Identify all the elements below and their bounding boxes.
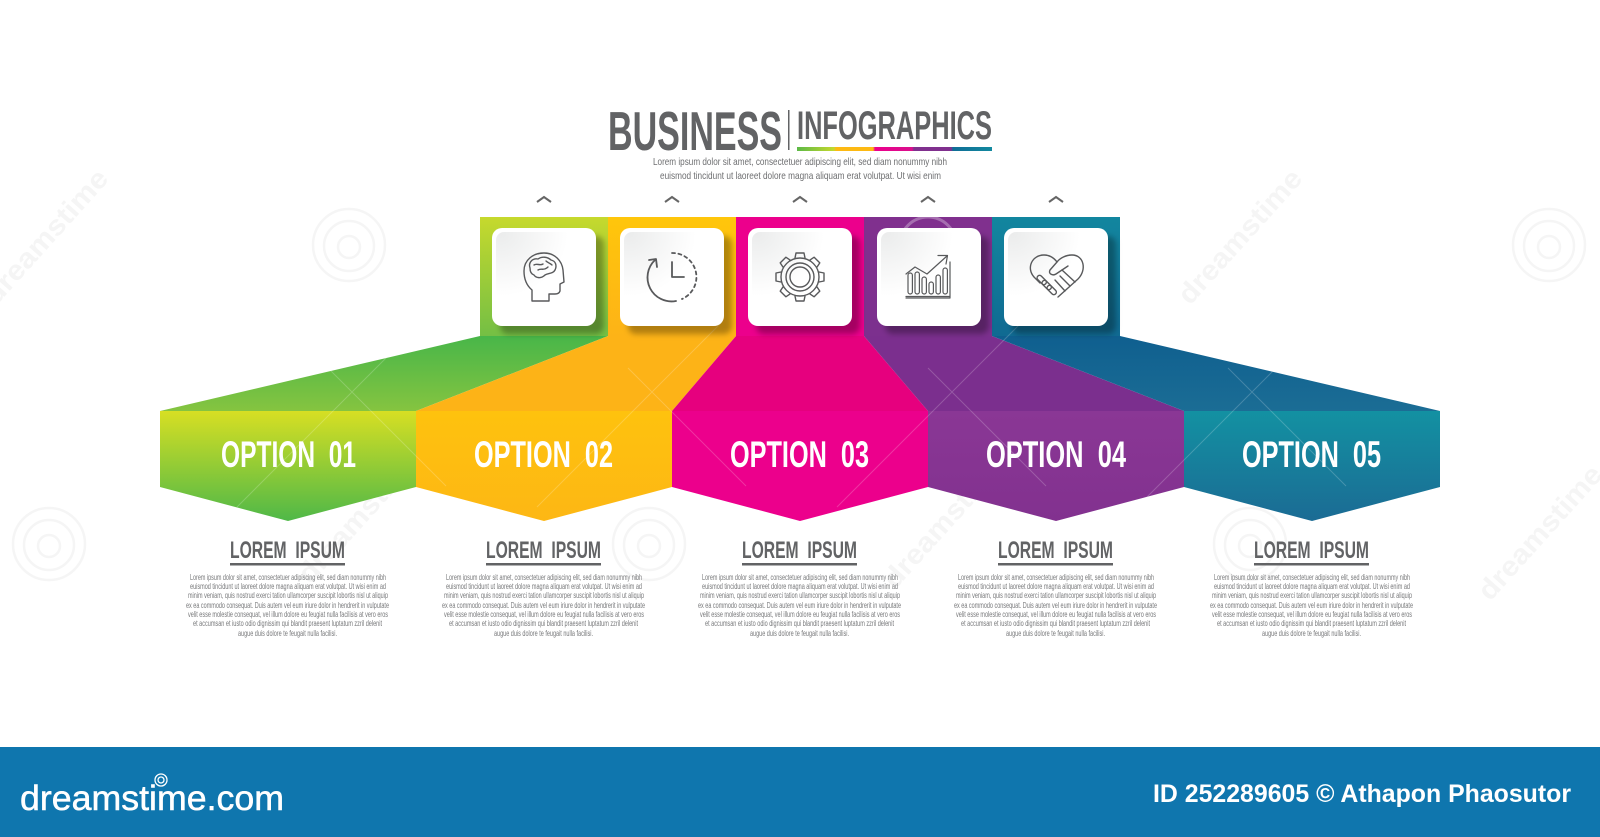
text block 03: velit esse molestie consequat, vel illum dolore eu feugiat nulla facilisis at vero eros: [700, 609, 900, 619]
heading: business: BUSINESS: [608, 100, 782, 162]
subtitle: Lorem ipsum dolor sit amet, consectetuer adipiscing elit, sed diam nonummy nibh: [653, 156, 947, 168]
background watermark on white: [0, 163, 1600, 606]
option 04 ribbon: [864, 217, 1184, 521]
text block 02: velit esse molestie consequat, vel illum dolore eu feugiat nulla facilisis at vero eros: [444, 609, 644, 619]
background watermark on white: dreamstime: [1171, 163, 1308, 310]
subtitle: euismod tincidunt ut laoreet dolore magna aliquam erat volutpat. Ut wisi enim: [660, 170, 941, 182]
footer bar: [0, 747, 1600, 837]
text block 01: velit esse molestie consequat, vel illum dolore eu feugiat nulla facilisis at vero eros: [188, 609, 388, 619]
option labels: [221, 434, 1381, 475]
text block 05: [1210, 537, 1413, 638]
text block 03: et accumsan et iusto odio dignissim qui blandit praesent luptatum zzril delenit: [705, 618, 894, 628]
text block 03: minim veniam, quis nostrud exerci tation ullamcorper suscipit lobortis nisl ut aliquip: [700, 590, 900, 600]
icon: gear: [776, 253, 824, 301]
text block 04: minim veniam, quis nostrud exerci tation ullamcorper suscipit lobortis nisl ut aliquip: [956, 590, 1156, 600]
text block 03: augue duis dolore te feugait nulla facilisi.: [750, 628, 849, 638]
icon: growth chart: [906, 256, 950, 298]
text block 01: [186, 537, 389, 638]
text block 03: [698, 537, 901, 638]
text block 01: ex ea commodo consequat. Duis autem vel eum iriure dolor in hendrerit in vulputate: [186, 600, 389, 610]
square shadows: [500, 236, 1116, 334]
background watermark on white: dreamstime: [1471, 459, 1600, 606]
option 01 ribbon: [160, 217, 608, 521]
text block 02: minim veniam, quis nostrud exerci tation ullamcorper suscipit lobortis nisl ut aliquip: [444, 590, 644, 600]
option 05 ribbon: [992, 217, 1440, 521]
text block 02: euismod tincidunt ut laoreet dolore magna aliquam erat volutpat. Ut wisi enim ad: [446, 581, 642, 591]
text block 03: LOREM IPSUM: [742, 537, 857, 564]
text block 04: velit esse molestie consequat, vel illum dolore eu feugiat nulla facilisis at vero eros: [956, 609, 1156, 619]
icon card: handshake: [1004, 228, 1108, 326]
footer logo: dreamstime.com: [20, 779, 284, 818]
text block 05: augue duis dolore te feugait nulla facilisi.: [1262, 628, 1361, 638]
text block 03: Lorem ipsum dolor sit amet, consectetuer adipiscing elit, sed diam nonummy nibh: [702, 572, 898, 582]
label 03: OPTION 03: [730, 434, 869, 475]
caret markers: [537, 197, 1063, 202]
text block 02: et accumsan et iusto odio dignissim qui blandit praesent luptatum zzril delenit: [449, 618, 638, 628]
text block 04: [954, 537, 1157, 638]
text block 01: Lorem ipsum dolor sit amet, consectetuer adipiscing elit, sed diam nonummy nibh: [190, 572, 386, 582]
text block 04: LOREM IPSUM: [998, 537, 1113, 564]
text block 04: augue duis dolore te feugait nulla facilisi.: [1006, 628, 1105, 638]
label 02: OPTION 02: [474, 434, 613, 475]
option 02 ribbon: [416, 217, 736, 521]
subtitle: [653, 156, 947, 182]
footer credit: ID 252289605 © Athapon Phaosutor: [1153, 780, 1571, 808]
icon: handshake heart: [1030, 255, 1083, 297]
label 01: OPTION 01: [221, 434, 356, 475]
text block 04: Lorem ipsum dolor sit amet, consectetuer adipiscing elit, sed diam nonummy nibh: [958, 572, 1154, 582]
icon card: gear: [748, 228, 852, 326]
icon: clock with arrow: [648, 253, 696, 301]
text block 02: augue duis dolore te feugait nulla facilisi.: [494, 628, 593, 638]
label 04: OPTION 04: [986, 434, 1126, 475]
text block 05: LOREM IPSUM: [1254, 537, 1369, 564]
text block 05: velit esse molestie consequat, vel illum dolore eu feugiat nulla facilisis at vero eros: [1212, 609, 1412, 619]
watermark lines over ribbons: [237, 217, 1346, 507]
text block 05: et accumsan et iusto odio dignissim qui blandit praesent luptatum zzril delenit: [1217, 618, 1406, 628]
text block 04: et accumsan et iusto odio dignissim qui blandit praesent luptatum zzril delenit: [961, 618, 1150, 628]
text block 04: ex ea commodo consequat. Duis autem vel eum iriure dolor in hendrerit in vulputate: [954, 600, 1157, 610]
text block 01: et accumsan et iusto odio dignissim qui blandit praesent luptatum zzril delenit: [193, 618, 382, 628]
icon card: chart: [877, 228, 981, 326]
background watermark on white: dreamstime: [291, 442, 428, 589]
icon card: brain: [492, 228, 596, 326]
text block 05: euismod tincidunt ut laoreet dolore magna aliquam erat volutpat. Ut wisi enim ad: [1214, 581, 1410, 591]
heading: infographics: INFOGRAPHICS: [797, 104, 992, 148]
text block 05: ex ea commodo consequat. Duis autem vel eum iriure dolor in hendrerit in vulputate: [1210, 600, 1413, 610]
option 03 ribbon: [672, 217, 928, 521]
label 05: OPTION 05: [1242, 434, 1381, 475]
text block 01: LOREM IPSUM: [230, 537, 345, 564]
text block 02: LOREM IPSUM: [486, 537, 601, 564]
icon card: clock: [620, 228, 724, 326]
text block 03: euismod tincidunt ut laoreet dolore magna aliquam erat volutpat. Ut wisi enim ad: [702, 581, 898, 591]
text block 01: minim veniam, quis nostrud exerci tation ullamcorper suscipit lobortis nisl ut aliquip: [188, 590, 388, 600]
text block 02: ex ea commodo consequat. Duis autem vel eum iriure dolor in hendrerit in vulputate: [442, 600, 645, 610]
text block 01: augue duis dolore te feugait nulla facilisi.: [238, 628, 337, 638]
rainbow underline: [797, 147, 992, 151]
text block 04: euismod tincidunt ut laoreet dolore magna aliquam erat volutpat. Ut wisi enim ad: [958, 581, 1154, 591]
text block 03: ex ea commodo consequat. Duis autem vel eum iriure dolor in hendrerit in vulputate: [698, 600, 901, 610]
icon: head with brain: [524, 253, 564, 301]
background watermark on white: dreamstime: [876, 447, 1013, 594]
footer logo spiral: [155, 774, 167, 786]
text block 02: [442, 537, 645, 638]
text block 05: Lorem ipsum dolor sit amet, consectetuer adipiscing elit, sed diam nonummy nibh: [1214, 572, 1410, 582]
title: [608, 100, 992, 182]
text block 02: Lorem ipsum dolor sit amet, consectetuer adipiscing elit, sed diam nonummy nibh: [446, 572, 642, 582]
text block 05: minim veniam, quis nostrud exerci tation ullamcorper suscipit lobortis nisl ut aliquip: [1212, 590, 1412, 600]
text block 01: euismod tincidunt ut laoreet dolore magna aliquam erat volutpat. Ut wisi enim ad: [190, 581, 386, 591]
